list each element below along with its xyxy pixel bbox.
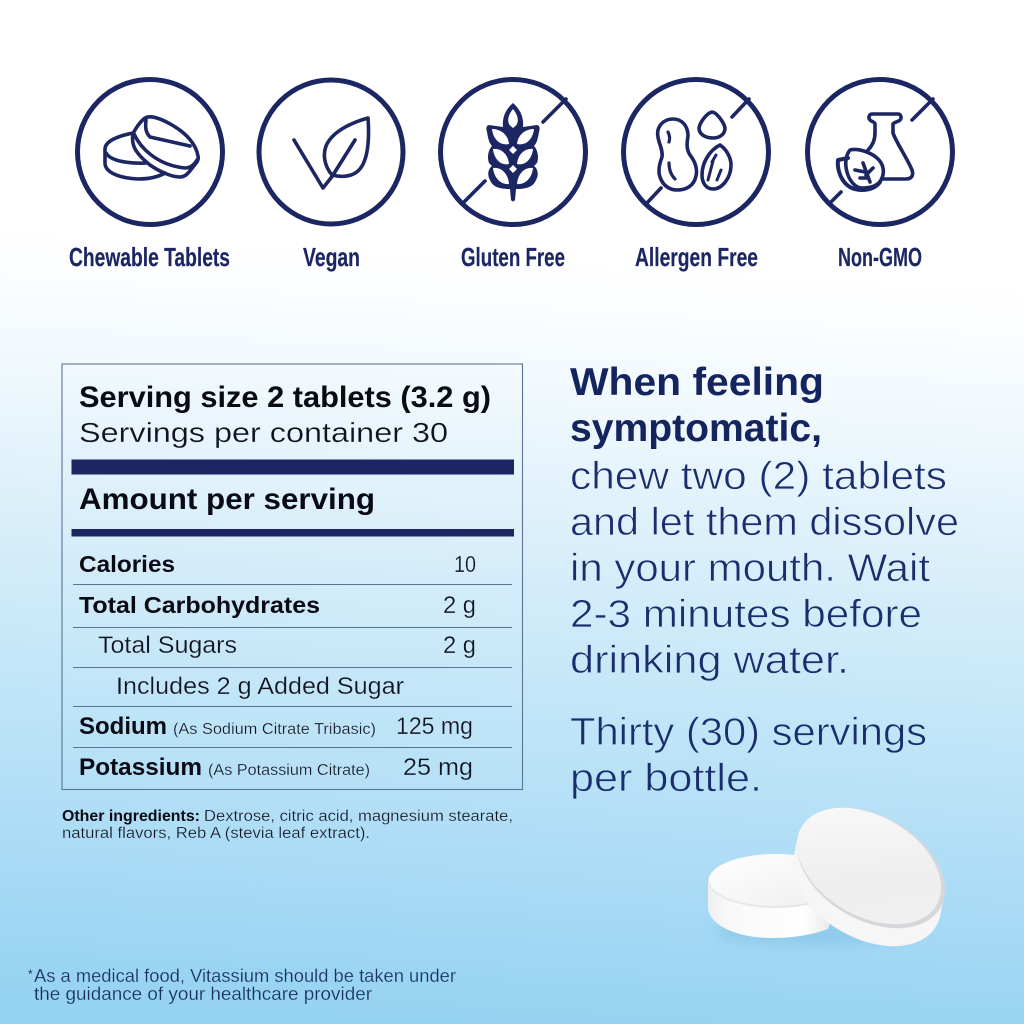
row: sugars: Total Sugars xyxy=(98,632,237,659)
footnote: the guidance of your healthcare provider xyxy=(34,984,372,1004)
other ingredients: Dextrose, citric acid, magnesium stearate, xyxy=(204,808,513,825)
row: carbohydrates: 2 g xyxy=(443,592,476,619)
thick divider bottom xyxy=(72,529,514,536)
row: sodium: 125 mg xyxy=(396,713,473,740)
servings per container: Servings per container 30 xyxy=(79,417,448,448)
row: sodium: Sodium xyxy=(79,713,167,740)
icon: vegan leaf xyxy=(259,80,403,224)
row: potassium: (As Potassium Citrate) xyxy=(208,762,370,779)
row: sodium xyxy=(79,713,473,740)
directions text: drinking water. xyxy=(570,639,849,682)
servings per bottle text: Thirty (30) servings xyxy=(570,711,927,754)
label: gluten free: Gluten Free xyxy=(461,242,565,272)
other ingredients: natural flavors, Reb A (stevia leaf extract). xyxy=(62,825,370,842)
row: calories: 10 xyxy=(454,551,476,577)
footnote: As a medical food, Vitassium should be taken under xyxy=(34,966,456,986)
row: sugars: 2 g xyxy=(443,632,476,659)
directions text: in your mouth. Wait xyxy=(570,547,930,590)
icon: allergen free nuts xyxy=(624,80,768,224)
row: potassium: 25 mg xyxy=(403,754,473,781)
row: sodium: (As Sodium Citrate Tribasic) xyxy=(173,721,376,738)
other ingredients: Other ingredients: xyxy=(62,808,200,825)
row: carbohydrates xyxy=(79,592,476,619)
directions text: chew two (2) tablets xyxy=(570,455,947,498)
label: chewable tablets: Chewable Tablets xyxy=(69,242,230,272)
servings per bottle text xyxy=(570,711,927,800)
directions text: When feeling xyxy=(570,361,824,404)
row: potassium xyxy=(79,754,473,781)
directions text xyxy=(570,361,959,682)
row: sugars xyxy=(98,632,476,659)
icon: non-GMO flask xyxy=(808,80,952,224)
icon row xyxy=(78,80,952,224)
row: carbohydrates: Total Carbohydrates xyxy=(79,592,320,618)
image: two white tablets xyxy=(708,783,966,971)
directions text: symptomatic, xyxy=(570,407,822,450)
row: calories xyxy=(79,551,476,577)
footnote: * xyxy=(28,967,33,981)
label: allergen free: Allergen Free xyxy=(635,242,758,272)
amount per serving heading: Amount per serving xyxy=(79,483,375,516)
directions text: and let them dissolve xyxy=(570,501,959,544)
servings per bottle text: per bottle. xyxy=(570,757,762,800)
thick divider top xyxy=(72,460,514,474)
row: potassium: Potassium xyxy=(79,754,202,781)
label: non-GMO: Non-GMO xyxy=(838,242,922,272)
row: calories: Calories xyxy=(79,551,175,577)
icon labels xyxy=(69,242,922,272)
serving size heading: Serving size 2 tablets (3.2 g) xyxy=(79,381,491,414)
label: vegan: Vegan xyxy=(303,242,360,272)
icon: gluten free wheat xyxy=(440,80,586,224)
directions text: 2-3 minutes before xyxy=(570,593,922,636)
footnote xyxy=(28,966,456,1004)
panel: supplement facts xyxy=(62,364,522,790)
other ingredients xyxy=(62,808,513,842)
icon: chewable tablets xyxy=(78,80,222,224)
row: added sugar: Includes 2 g Added Sugar xyxy=(116,673,404,700)
